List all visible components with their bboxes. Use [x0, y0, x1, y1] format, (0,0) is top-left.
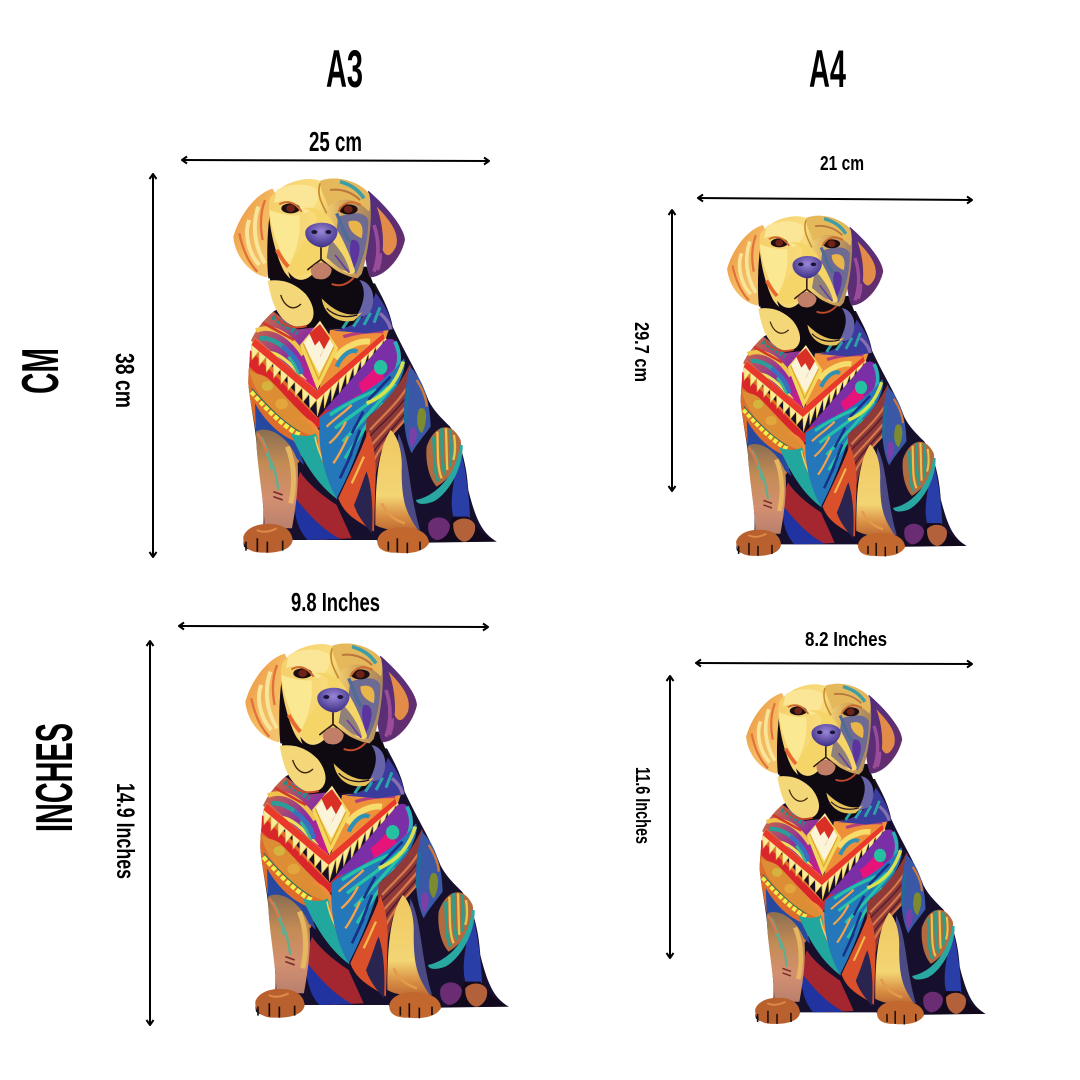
height label 38 cm: 38 cm	[110, 353, 140, 408]
dog illustration	[233, 179, 497, 553]
width arrow	[179, 622, 488, 630]
width label 8.2 Inches: 8.2 Inches	[805, 629, 887, 651]
dog illustration	[245, 644, 509, 1018]
heading: A4: A4	[809, 40, 846, 99]
panel: A4 cm	[630, 153, 972, 556]
width arrow	[182, 156, 489, 164]
dog illustration	[727, 216, 966, 556]
height arrow	[150, 174, 156, 557]
height label 29.7 cm: 29.7 cm	[630, 322, 652, 382]
width arrow	[698, 194, 972, 204]
panel: A3 cm	[110, 126, 497, 557]
height arrow	[668, 210, 676, 491]
width arrow	[696, 660, 972, 668]
height arrow	[146, 641, 154, 1025]
width label 25 cm: 25 cm	[309, 126, 362, 157]
row label: CM: CM	[12, 348, 70, 394]
height label 11.6 Inches: 11.6 Inches	[631, 767, 653, 844]
panel: A4 inches	[631, 629, 985, 1024]
heading: A3: A3	[326, 40, 363, 99]
panel: A3 inches	[111, 587, 509, 1025]
width label 9.8 Inches: 9.8 Inches	[291, 587, 380, 617]
width label 21 cm: 21 cm	[820, 153, 864, 175]
dog illustration	[746, 684, 985, 1024]
height arrow	[666, 676, 674, 958]
height label 14.9 Inches: 14.9 Inches	[111, 783, 139, 879]
row label: INCHES: INCHES	[26, 723, 84, 832]
